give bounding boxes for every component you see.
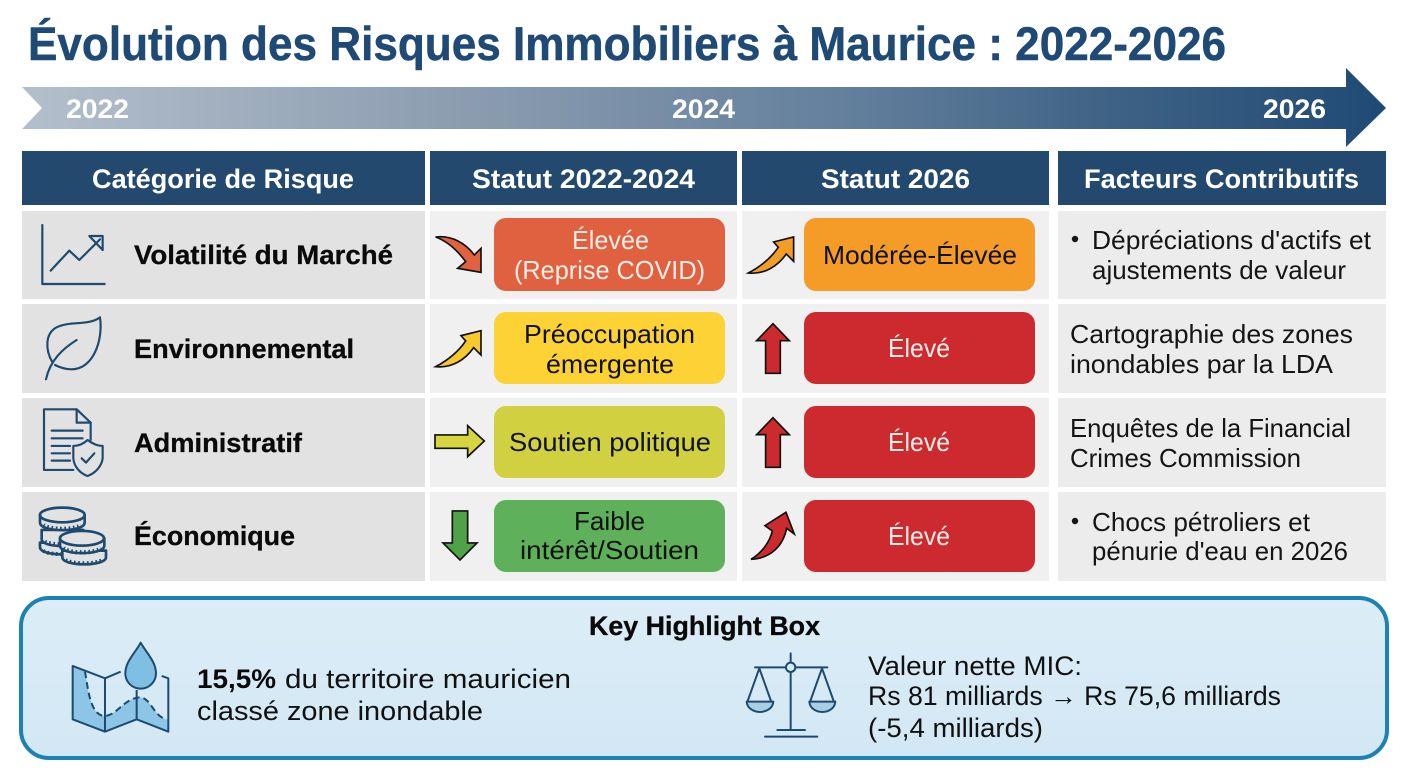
factor text: inondables par la LDA bbox=[1070, 349, 1334, 379]
pill: high, COVID recovery: (Reprise COVID) bbox=[514, 255, 705, 285]
row: economic bbox=[22, 492, 1386, 581]
arrow: curved down bbox=[436, 237, 481, 272]
arrow: curved up bbox=[436, 331, 481, 367]
factor text: Enquêtes de la Financial bbox=[1070, 413, 1351, 443]
pill: high, COVID recovery bbox=[494, 218, 725, 291]
icon: flood map with water drop bbox=[73, 643, 168, 732]
label: Administratif bbox=[134, 428, 303, 458]
row: administrative bbox=[22, 398, 1386, 487]
pill: emerging concern: Préoccupation bbox=[524, 319, 695, 349]
row: market volatility bbox=[22, 211, 1386, 299]
arrow: right bbox=[435, 426, 484, 457]
arrow: down bbox=[443, 511, 477, 560]
pill: high: Élevé bbox=[888, 521, 950, 551]
icon: document with shield bbox=[44, 409, 103, 476]
arrow: curved up bbox=[748, 237, 794, 273]
icon: balance scales bbox=[747, 653, 835, 737]
pill: high: Élevé bbox=[888, 427, 950, 457]
arrow: curved up bbox=[751, 512, 794, 559]
heading: status 2026: Statut 2026 bbox=[821, 164, 970, 194]
stat: flood zone share: du territoire mauricien bbox=[285, 664, 571, 694]
pill: political support: Soutien politique bbox=[509, 427, 711, 457]
factor text: Chocs pétroliers et bbox=[1092, 507, 1311, 537]
stat: MIC net value: Valeur nette MIC: bbox=[868, 651, 1082, 681]
factor text bbox=[1070, 319, 1353, 379]
pill: political support bbox=[494, 406, 725, 478]
pill: low interest / support: Faible bbox=[574, 506, 645, 536]
stat: MIC net value bbox=[868, 651, 1281, 743]
arrow: up bbox=[757, 324, 789, 373]
pill: moderate-high bbox=[804, 218, 1035, 291]
stat: flood zone share: 15,5% bbox=[197, 664, 276, 694]
factor text: Dépréciations d'actifs et bbox=[1092, 225, 1372, 255]
pill: low interest / support: intérêt/Soutien bbox=[520, 535, 699, 565]
icon: line chart bbox=[42, 225, 105, 284]
year 2026: 2026 bbox=[1263, 94, 1326, 124]
factor text: pénurie d'eau en 2026 bbox=[1092, 536, 1348, 566]
panel: key highlight box bbox=[21, 598, 1387, 758]
year 2022: 2022 bbox=[66, 94, 129, 124]
row: environmental bbox=[22, 304, 1386, 393]
factor text bbox=[1072, 507, 1348, 566]
timeline arrow bbox=[22, 68, 1386, 147]
pill: high, COVID recovery: Élevée bbox=[572, 225, 649, 255]
year 2024: 2024 bbox=[672, 94, 735, 124]
heading: contributing factors: Facteurs Contributifs bbox=[1084, 164, 1359, 194]
pill: high: Élevé bbox=[888, 333, 950, 363]
pill: emerging concern: émergente bbox=[546, 349, 674, 379]
heading: key highlight: Key Highlight Box bbox=[589, 611, 820, 641]
factor text bbox=[1072, 225, 1372, 285]
stat: MIC net value: Rs 81 milliards → Rs 75,6 milliards bbox=[868, 681, 1281, 711]
pill: emerging concern bbox=[494, 312, 725, 384]
factor text: ajustements de valeur bbox=[1092, 255, 1346, 285]
heading: risk category: Catégorie de Risque bbox=[92, 164, 354, 194]
pill: high bbox=[804, 406, 1035, 478]
stat: flood zone share: classé zone inondable bbox=[197, 696, 483, 726]
stat: flood zone share bbox=[197, 664, 571, 726]
label: Environnemental bbox=[134, 334, 354, 364]
factor text bbox=[1070, 413, 1351, 473]
label: Économique bbox=[134, 520, 295, 551]
pill: high bbox=[804, 312, 1035, 384]
heading: status 2022-2024: Statut 2022-2024 bbox=[472, 164, 695, 194]
factor text: Crimes Commission bbox=[1070, 443, 1301, 473]
pill: moderate-high: Modérée-Élevée bbox=[823, 240, 1017, 270]
stat: MIC net value: (-5,4 milliards) bbox=[868, 713, 1043, 743]
pill: high bbox=[804, 500, 1035, 572]
title: Évolution des Risques Immobiliers à Maurice : 2022-2026 bbox=[28, 17, 1226, 70]
arrow: up bbox=[757, 418, 789, 467]
table header bbox=[22, 151, 1386, 205]
factor text: Cartographie des zones bbox=[1070, 319, 1353, 349]
label: Volatilité du Marché bbox=[134, 240, 393, 270]
icon: coins bbox=[40, 508, 106, 564]
pill: low interest / support bbox=[494, 500, 725, 572]
icon: leaf bbox=[46, 317, 101, 379]
